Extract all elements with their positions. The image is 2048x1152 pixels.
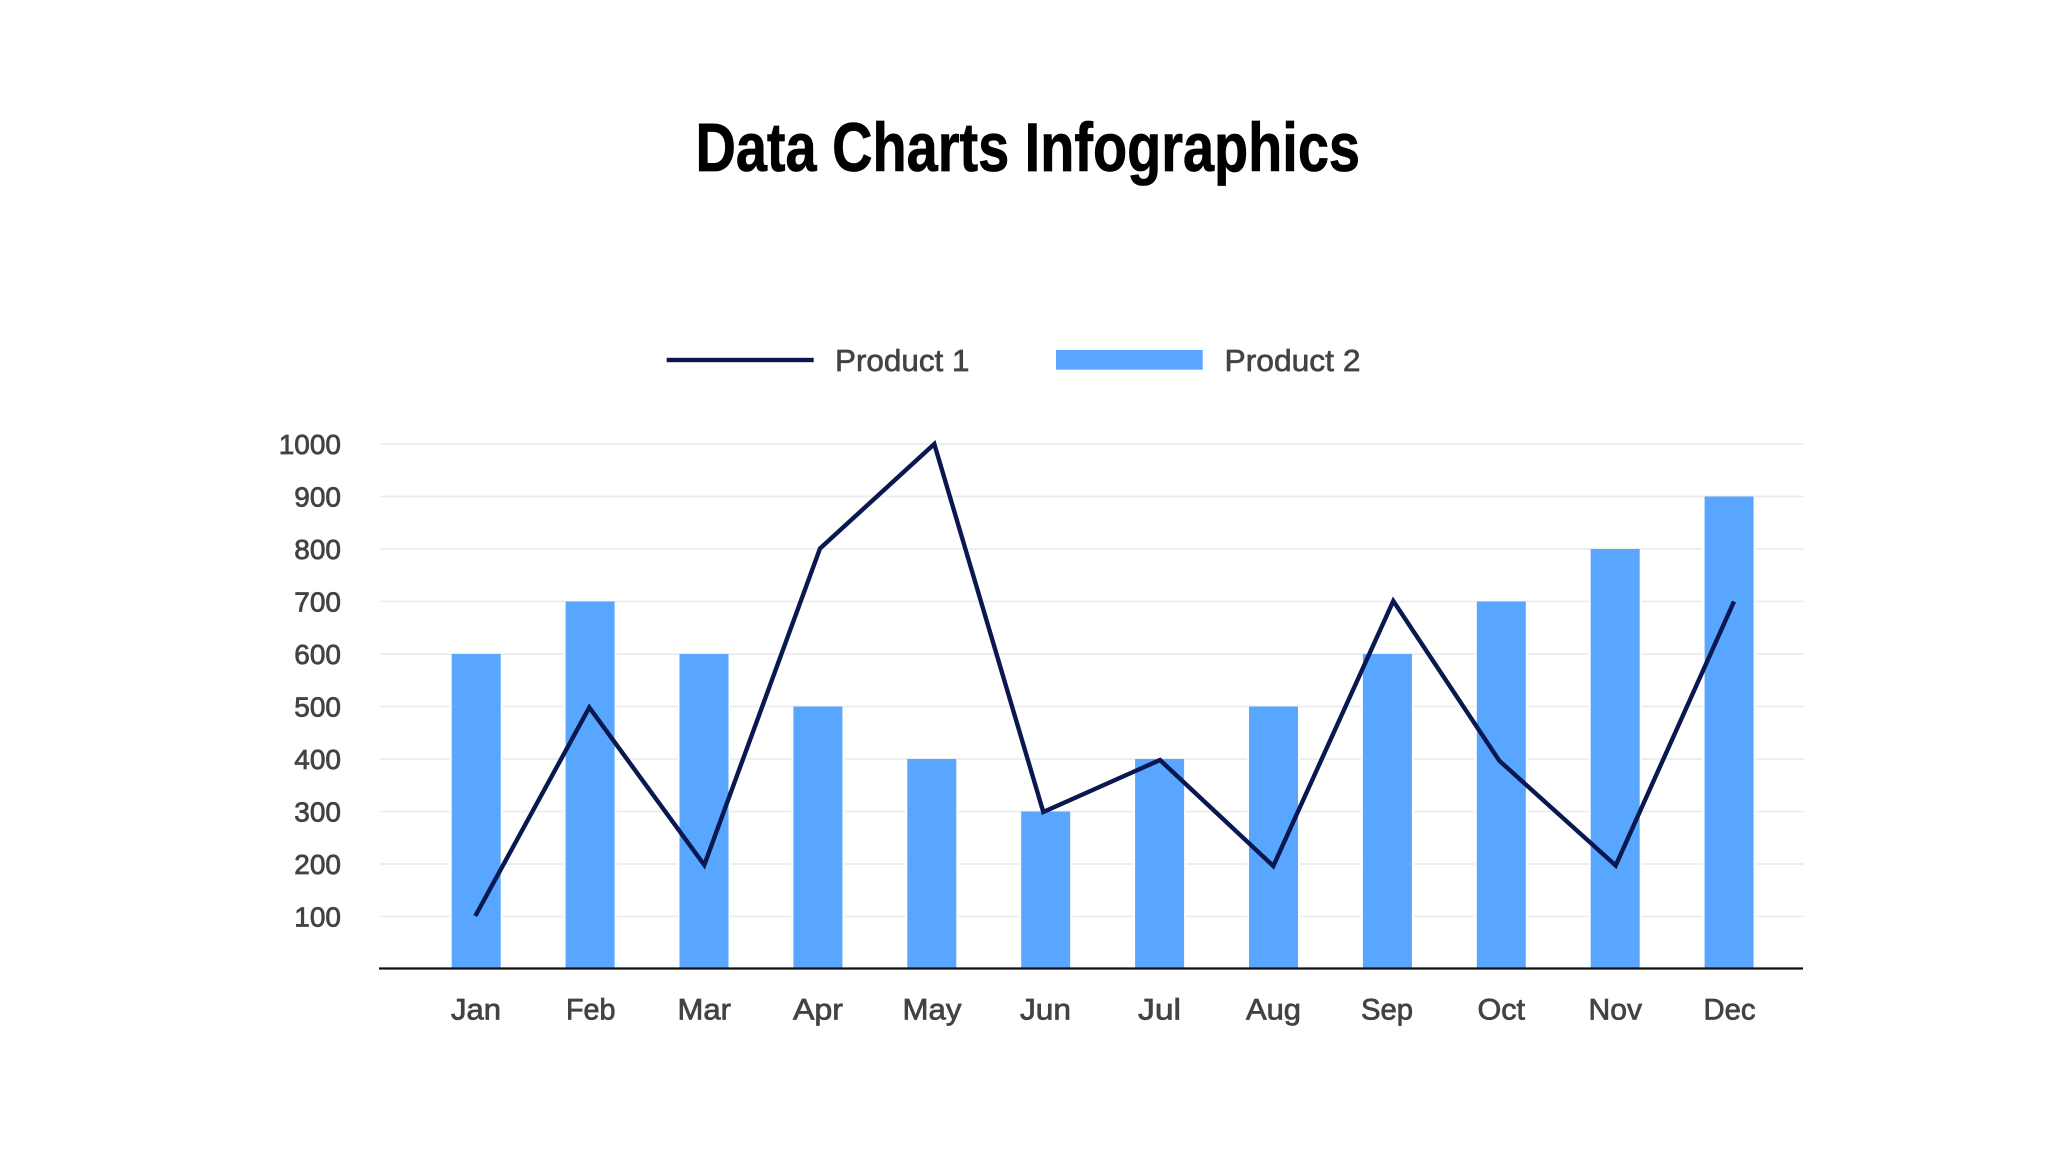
- y axis labels: 200: [294, 849, 341, 880]
- x axis month labels: Aug: [1246, 994, 1301, 1026]
- legend: product 1: Product 1: [835, 343, 970, 378]
- x axis month labels: Mar: [678, 994, 731, 1026]
- legend: [667, 343, 1360, 378]
- x axis month labels: Jul: [1138, 994, 1181, 1026]
- y axis labels: 400: [294, 744, 341, 775]
- title: Data Charts Infographics: [696, 109, 1360, 186]
- x axis month labels: Dec: [1704, 994, 1756, 1026]
- x axis line: [379, 967, 1803, 970]
- legend: product 2: Product 2: [1224, 343, 1360, 378]
- y axis labels: 900: [294, 481, 341, 512]
- y axis labels: [279, 429, 341, 932]
- x axis month labels: Jun: [1020, 994, 1071, 1026]
- bars: product 2: [450, 496, 1756, 968]
- y axis labels: 800: [294, 534, 341, 565]
- y axis labels: 600: [294, 639, 341, 670]
- legend: product 2: [1056, 343, 1360, 378]
- x axis month labels: Sep: [1361, 994, 1413, 1026]
- legend: product 1: [667, 343, 970, 378]
- x axis month labels: Oct: [1478, 994, 1525, 1026]
- x axis month labels: Apr: [793, 994, 843, 1026]
- combo chart: [279, 429, 1804, 1026]
- y axis labels: 1000: [279, 429, 341, 460]
- x axis month labels: [451, 994, 1756, 1026]
- x axis month labels: Nov: [1588, 994, 1642, 1026]
- line series: product 1: [475, 444, 1734, 916]
- x axis month labels: May: [902, 994, 962, 1026]
- y axis labels: 300: [294, 796, 341, 827]
- y axis labels: 500: [294, 691, 341, 722]
- x axis month labels: Jan: [451, 994, 501, 1026]
- y axis labels: 100: [294, 901, 341, 932]
- y axis labels: 700: [294, 586, 341, 617]
- x axis month labels: Feb: [566, 994, 616, 1026]
